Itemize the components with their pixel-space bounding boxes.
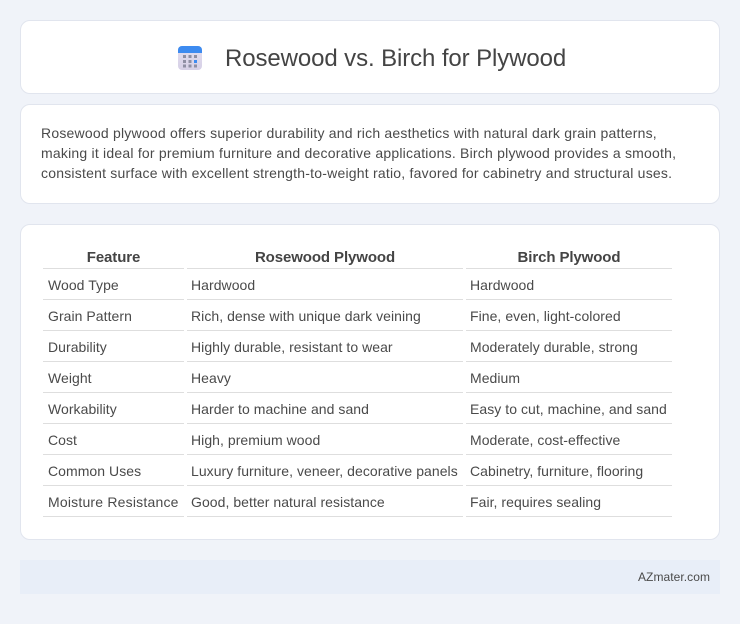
header: Birch Plywood: Birch Plywood — [518, 249, 620, 266]
header: Feature: Feature — [87, 249, 140, 266]
comparison table: Good, better natural resistance — [191, 494, 385, 510]
panel: description — [20, 104, 720, 204]
panel: comparison table — [20, 224, 720, 540]
panel: title card — [20, 20, 720, 94]
comparison table: Cabinetry, furniture, flooring — [470, 463, 643, 479]
comparison table: Weight — [48, 370, 92, 386]
comparison table: Moderately durable, strong — [470, 339, 638, 355]
description text: Rosewood plywood offers superior durability and rich aesthetics with natural dark grain patterns, — [41, 125, 657, 141]
comparison table: Harder to machine and sand — [191, 401, 369, 417]
description text: making it ideal for premium furniture and decorative applications. Birch plywood provides a smooth, — [41, 145, 676, 161]
comparison table: Moderate, cost-effective — [470, 432, 620, 448]
header: Rosewood Plywood: Rosewood Plywood — [255, 249, 395, 266]
comparison table: Hardwood — [470, 277, 534, 293]
comparison table: Fine, even, light-colored — [470, 308, 621, 324]
comparison table: Durability — [48, 339, 107, 355]
comparison table: High, premium wood — [191, 432, 320, 448]
comparison table: Cost — [48, 432, 77, 448]
comparison table: Moisture Resistance — [48, 494, 179, 510]
comparison table: Easy to cut, machine, and sand — [470, 401, 667, 417]
comparison table: Luxury furniture, veneer, decorative panels — [191, 463, 458, 479]
comparison table: Hardwood — [191, 277, 255, 293]
comparison table: Workability — [48, 401, 117, 417]
comparison table: Highly durable, resistant to wear — [191, 339, 393, 355]
comparison table: Grain Pattern — [48, 308, 132, 324]
description text: consistent surface with excellent strength-to-weight ratio, favored for cabinetry and structural uses. — [41, 165, 672, 181]
comparison table: Medium — [470, 370, 520, 386]
description text — [41, 125, 676, 181]
comparison table — [43, 249, 672, 517]
title: Rosewood vs. Birch for Plywood — [225, 45, 566, 72]
icon: calendar — [178, 46, 202, 70]
comparison table: Rich, dense with unique dark veining — [191, 308, 421, 324]
comparison table: Wood Type — [48, 277, 119, 293]
comparison table: Common Uses — [48, 463, 141, 479]
footer credit: AZmater.com — [638, 570, 710, 584]
footer bar — [20, 560, 720, 594]
comparison table: Fair, requires sealing — [470, 494, 601, 510]
comparison table: Heavy — [191, 370, 231, 386]
